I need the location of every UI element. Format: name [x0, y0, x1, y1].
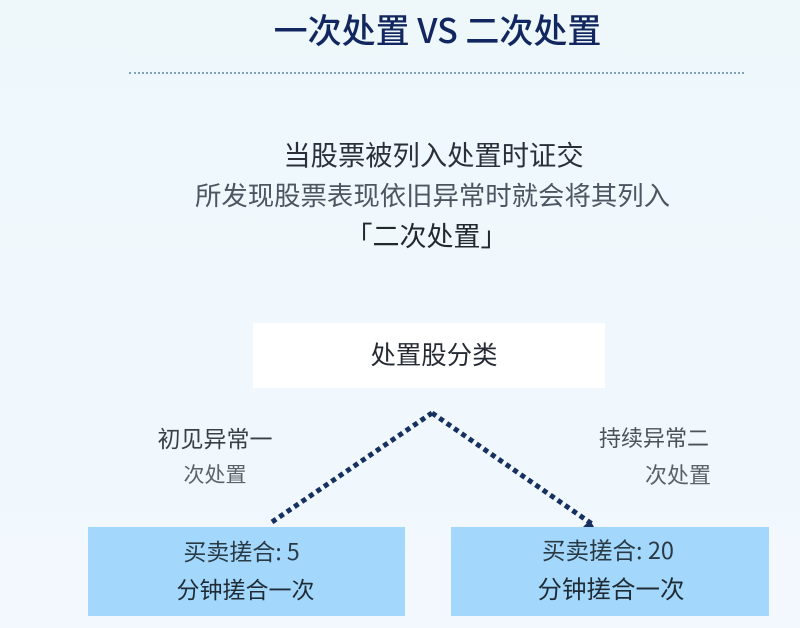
left label line 1: 初见异常一 [158, 420, 272, 454]
left box line 1: 买卖搓合: 5 [183, 533, 300, 567]
left box line 2: 分钟搓合一次 [176, 571, 314, 605]
category label: 处置股分类 [371, 336, 497, 372]
intro text block [195, 133, 670, 254]
right blue box [451, 527, 769, 616]
intro line 3: 「二次处置」 [346, 215, 508, 254]
right box line 1: 买卖搓合: 20 [542, 532, 674, 566]
intro line 2: 所发现股票表现依旧异常时就会将其列入 [195, 174, 670, 213]
right branch label [599, 421, 711, 490]
title: 一次处置 VS 二次处置 [274, 4, 601, 53]
right label line 1: 持续异常二 [599, 421, 709, 453]
category box [253, 323, 605, 388]
right box line 2: 分钟搓合一次 [538, 571, 684, 606]
intro line 1: 当股票被列入处置时证交 [283, 133, 584, 173]
left branch label [158, 420, 272, 489]
dotted divider [129, 72, 744, 74]
right label line 2: 次处置 [645, 458, 711, 490]
left blue box [88, 527, 405, 616]
left label line 2: 次处置 [184, 459, 246, 489]
